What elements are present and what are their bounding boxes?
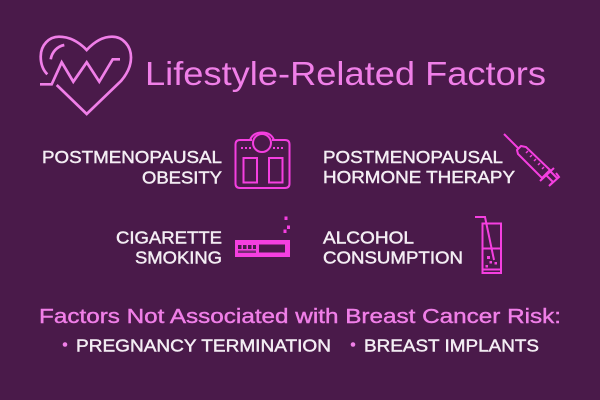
label: alcohol consumption <box>323 228 463 268</box>
icon: glass with straw <box>475 217 501 273</box>
list: pregnancy termination and breast implants: BREAST IMPLANTS <box>364 336 539 356</box>
icon: weight scale <box>236 132 290 188</box>
label: cigarette smoking: SMOKING <box>135 248 222 268</box>
icon: cigarette <box>235 216 290 257</box>
title: Lifestyle-Related Factors <box>145 56 546 93</box>
list: pregnancy termination and breast implants <box>63 336 539 356</box>
heading: factors not associated: Factors Not Associated with Breast Cancer Risk: <box>39 306 561 328</box>
label: postmenopausal hormone therapy: POSTMENOPAUSAL <box>323 147 503 167</box>
label: cigarette smoking <box>116 228 222 268</box>
icon: heart with pulse <box>40 37 131 114</box>
list: pregnancy termination and breast implants: PREGNANCY TERMINATION <box>76 336 331 356</box>
label: alcohol consumption: ALCOHOL <box>323 228 414 248</box>
label: postmenopausal hormone therapy: HORMONE THERAPY <box>323 167 515 187</box>
label: postmenopausal obesity: OBESITY <box>142 167 222 187</box>
label: postmenopausal obesity: POSTMENOPAUSAL <box>42 147 222 167</box>
icon: syringe <box>504 134 559 186</box>
label: alcohol consumption: CONSUMPTION <box>323 248 463 268</box>
label: postmenopausal hormone therapy <box>323 147 515 187</box>
label: postmenopausal obesity <box>42 147 222 187</box>
label: cigarette smoking: CIGARETTE <box>116 228 222 248</box>
